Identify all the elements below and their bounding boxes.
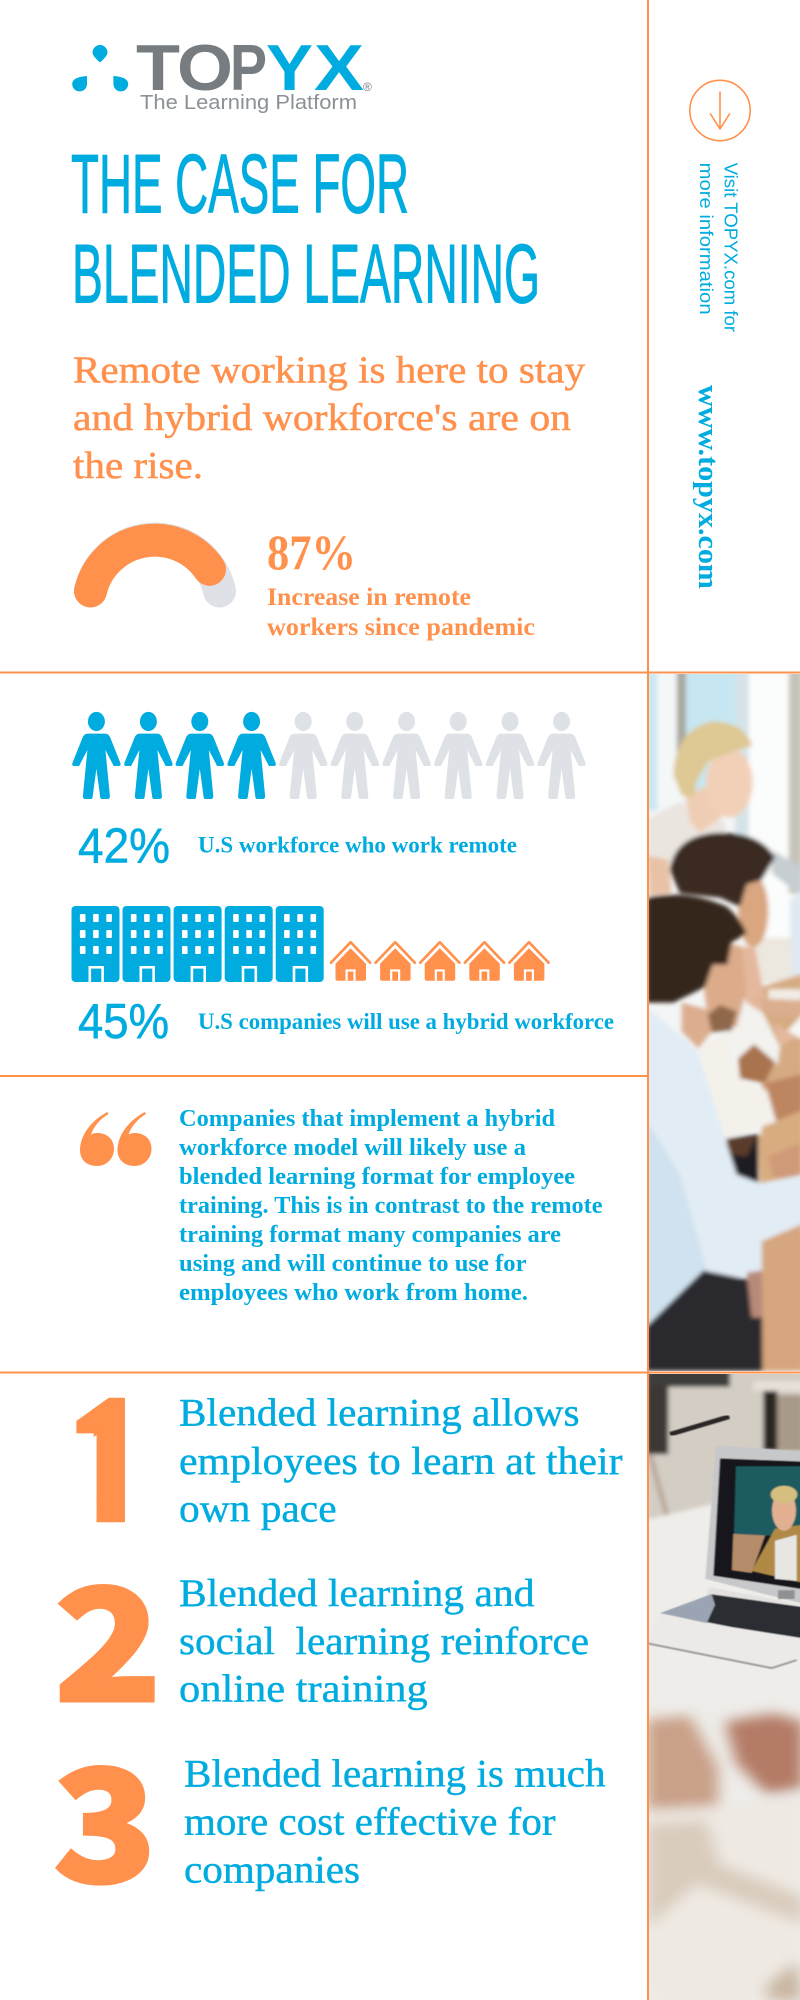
title	[71, 136, 540, 321]
reason 2 text: Blended learning and	[179, 1572, 535, 1615]
stat: 42%: 42%	[78, 820, 170, 874]
title: THE CASE FOR	[71, 136, 409, 230]
icon: arrow in circle	[690, 80, 750, 141]
sidebar text: visit TOPYX	[696, 163, 742, 332]
intro text: the rise.	[73, 445, 203, 487]
quote text: training. This is in contrast to the remote	[179, 1193, 603, 1219]
reason 1 text: Blended learning allows	[179, 1392, 580, 1435]
photo: laptop video call	[647, 1370, 800, 2000]
icon: quotation mark	[80, 1112, 152, 1166]
reason 3 text: Blended learning is much	[184, 1753, 606, 1796]
pictogram: people 42%	[72, 712, 586, 799]
logo wordmark: P	[230, 31, 267, 104]
gauge chart: 87%	[90, 539, 220, 591]
pictogram: buildings	[72, 906, 324, 982]
logo wordmark: X	[314, 31, 364, 104]
quote text: blended learning format for employee	[179, 1164, 575, 1190]
numeral 1: 1	[58, 1325, 162, 1571]
quote text: workforce model will likely use a	[179, 1135, 526, 1161]
sidebar url: www.topyx.com	[692, 385, 723, 589]
logo: TOPYX The Learning Platform	[72, 31, 372, 114]
numeral 3: 3	[53, 1701, 157, 1927]
photo: colleagues around a table	[647, 670, 800, 1371]
stat: 45%: 45%	[78, 995, 169, 1049]
icon: three blue drops	[72, 45, 128, 91]
reason 2 text	[179, 1572, 589, 1711]
reason 3 text	[184, 1753, 606, 1891]
blue people	[72, 712, 276, 799]
stat: 87% increase	[267, 524, 535, 641]
logo tagline: The Learning Platform	[140, 92, 357, 114]
quote text: employees who work from home.	[179, 1280, 528, 1306]
reason 1 text: employees to learn at their	[179, 1440, 623, 1483]
logo wordmark: T	[136, 31, 180, 104]
intro text: and hybrid workforce's are on	[73, 397, 571, 439]
quote text	[179, 1106, 603, 1306]
reason 1 text	[179, 1392, 623, 1531]
label: hybrid workforce: U.S companies will use a hybrid workforce	[198, 1009, 614, 1034]
intro text: Remote working is here to stay	[73, 350, 585, 392]
stat: 87% increase: Increase in remote	[267, 584, 471, 611]
logo wordmark: O	[177, 31, 233, 104]
reason 2 text: online training	[179, 1668, 428, 1711]
reason 2 text: social learning reinforce	[179, 1620, 589, 1663]
sidebar text: visit TOPYX: Visit TOPYX.com for	[720, 163, 742, 332]
quote text: training format many companies are	[179, 1222, 561, 1248]
logo wordmark: Y	[266, 31, 313, 104]
reason 3 text: more cost effective for	[184, 1801, 556, 1844]
registered mark: ®	[363, 80, 372, 94]
label: workforce remote: U.S workforce who work remote	[198, 833, 517, 858]
reason 1 text: own pace	[179, 1488, 337, 1531]
numeral 2: 2	[54, 1520, 162, 1746]
quote text: using and will continue to use for	[179, 1251, 527, 1277]
quote text: Companies that implement a hybrid	[179, 1106, 556, 1132]
intro text	[73, 350, 585, 487]
sidebar text: visit TOPYX: more information	[696, 163, 717, 315]
logo wordmark	[136, 31, 364, 104]
reason 3 text: companies	[184, 1848, 360, 1891]
stat: 87% increase: 87%	[267, 524, 356, 580]
grey people	[279, 712, 586, 799]
pictogram: houses	[331, 942, 549, 981]
stat: 87% increase: workers since pandemic	[267, 614, 535, 641]
